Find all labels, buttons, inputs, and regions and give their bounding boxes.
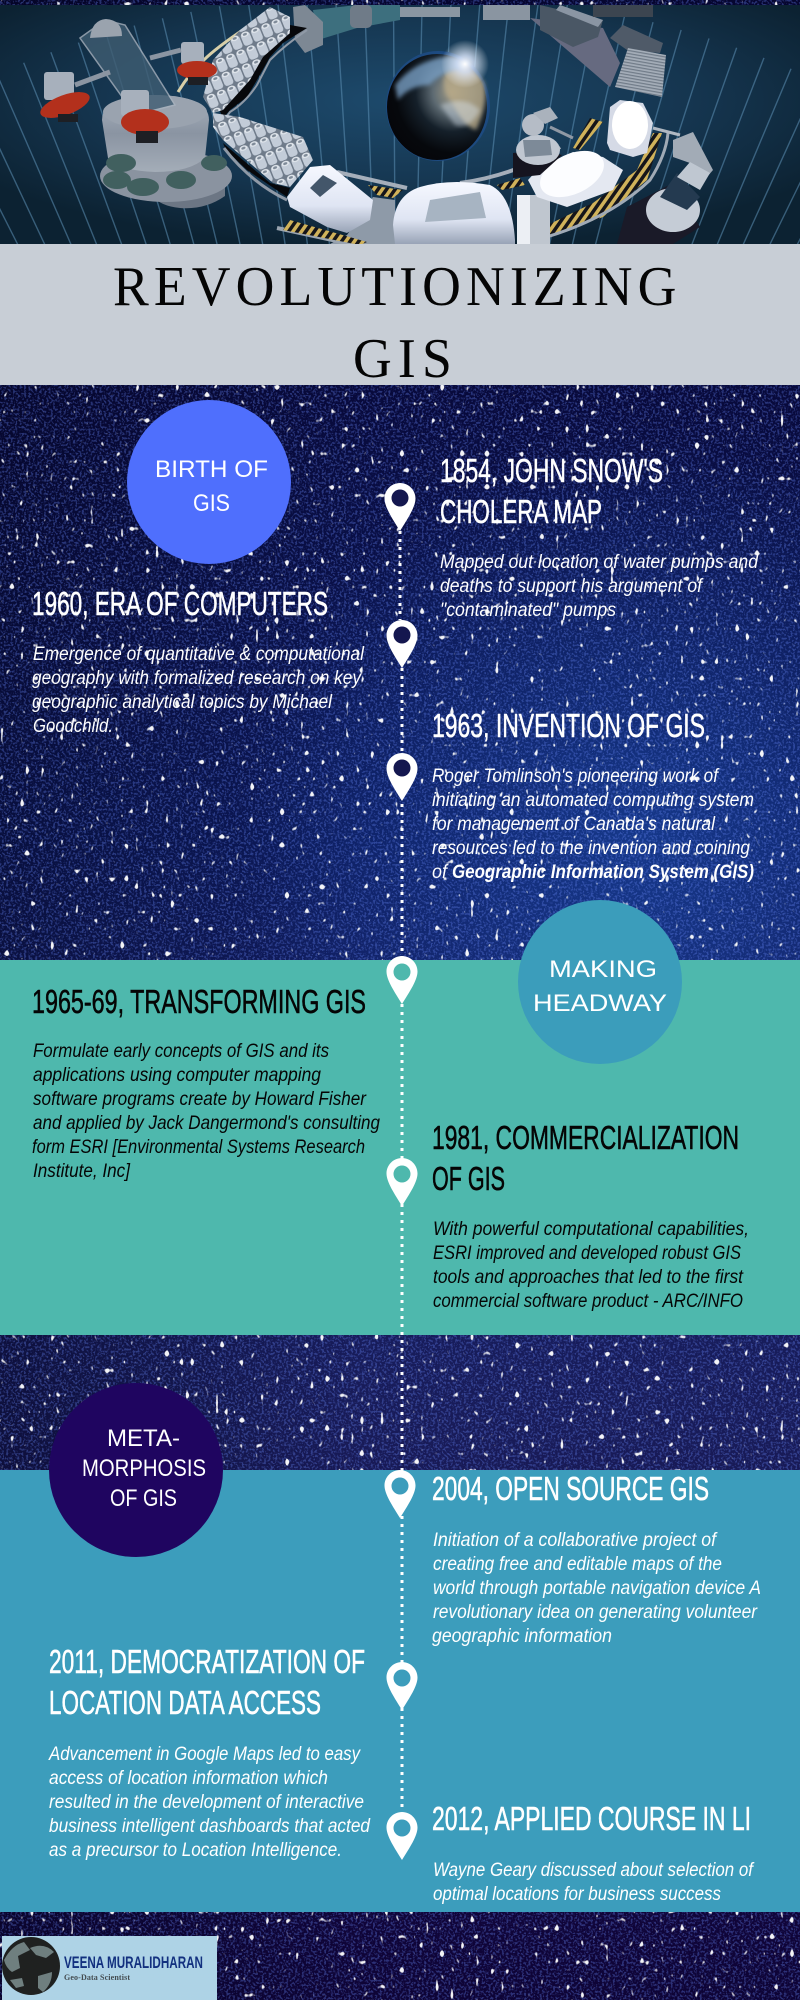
author banner: VEENA MURALIDHARAN [64,1953,203,1972]
text block: 1960 era of computers: 1960, ERA OF COMPUTERS [32,585,328,622]
left machine [37,19,232,208]
text block: 1960 era of computers [32,585,365,737]
section badge: metamorphosis of GIS [49,1383,223,1557]
section badge: metamorphosis of GIS: MORPHOSIS [82,1455,206,1482]
text block: 1965-69 transforming GIS: software programs create by Howard Fisher [33,1089,367,1110]
text block: 2012 applied course in LI [432,1800,755,1905]
heading: title: GIS [353,327,452,389]
cars on the line [287,100,653,244]
text block: 1981 commercialization of GIS: ESRI improved and developed robust GIS [433,1243,741,1264]
icon: red valves [37,42,217,143]
text block: 1854 John Snow [440,452,759,621]
text block: 1981 commercialization of GIS: OF GIS [432,1160,505,1197]
pin: 2012 [386,1812,418,1860]
text block: 1965-69 transforming GIS: and applied by Jack Dangermond's consulting [33,1113,380,1134]
assembly belt with hazard stripes [277,118,668,246]
text block: 1965-69 transforming GIS: applications using computer mapping [33,1065,321,1086]
pin: 1981 [386,1158,418,1206]
icon: globe [386,40,490,161]
section badge: birth of GIS [127,400,291,564]
text block: 1981 commercialization of GIS: commercial software product - ARC/INFO [433,1291,743,1312]
text block: 1965-69 transforming GIS: Formulate early concepts of GIS and its [33,1041,329,1062]
text block: 1960 era of computers: geographic analytical topics by Michael [32,692,333,713]
text block: 1981 commercialization of GIS: tools and approaches that led to the first [433,1267,744,1288]
text block: 2011 democratization of location data access: resulted in the development of interactive [49,1792,364,1813]
text block: 2004 open source GIS: creating free and editable maps of the [433,1554,722,1575]
text block: 1963 invention of GIS: Roger Tomlinson's pioneering work of [432,766,720,787]
text block: 1854 John Snow: CHOLERA MAP [440,493,602,530]
icon: author globe [2,1937,60,1995]
section badge: making headway: MAKING [549,956,657,983]
section badge: metamorphosis of GIS: OF GIS [110,1485,177,1512]
text block: 1965-69 transforming GIS: 1965-69, TRANSFORMING GIS [32,983,366,1020]
text block: 1965-69 transforming GIS: form ESRI [Environmental Systems Research [32,1137,365,1158]
text block: 2012 applied course in LI: optimal locations for business success [433,1884,721,1905]
conveyor band with bottles [178,7,313,200]
text block: 2011 democratization of location data access: business intelligent dashboards that acted [49,1816,371,1837]
text block: 2004 open source GIS [432,1470,761,1647]
title bar [0,244,800,389]
pin: 1965-69 [386,956,418,1004]
text block: 1854 John Snow: deaths to support his argument of [440,576,704,597]
section badge: birth of GIS: BIRTH OF [155,456,268,483]
text block: 1981 commercialization of GIS: With powerful computational capabilities, [433,1219,749,1240]
text block: 2011 democratization of location data access: access of location information which [49,1768,328,1789]
pin: 1854 [384,483,416,531]
text block: 1963 invention of GIS: initiating an automated computing system [432,790,754,811]
author banner: Geo-Data Scientist [64,1973,130,1982]
text block: 1965-69 transforming GIS [32,983,380,1182]
text block: 1963 invention of GIS: Geographic Information System (GIS) [452,862,754,883]
text block: 2011 democratization of location data access: 2011, DEMOCRATIZATION OF [49,1643,365,1680]
text block: 1981 commercialization of GIS [432,1119,749,1312]
text block: 2004 open source GIS: world through portable navigation device A [433,1578,761,1599]
text block: 1965-69 transforming GIS: Institute, Inc] [33,1161,131,1182]
text block: 1963 invention of GIS: resources led to the invention and coining [432,838,750,859]
text block: 2004 open source GIS: Initiation of a collaborative project of [433,1530,718,1551]
text block: 1960 era of computers: Goodchild. [33,716,113,737]
section badge: metamorphosis of GIS: META- [107,1425,180,1452]
text block: 2011 democratization of location data access: Advancement in Google Maps led to easy [48,1744,361,1765]
text block: 2011 democratization of location data access: LOCATION DATA ACCESS [49,1684,321,1721]
pin: 2004 [384,1470,416,1518]
timeline dotted line [400,531,402,1812]
text block: 1963 invention of GIS: for management of Canada's natural [432,814,716,835]
text block: 2011 democratization of location data access: as a precursor to Location Intelligence. [49,1840,342,1861]
panel: metamorphosis band [0,1470,800,1912]
heading: title: REVOLUTIONIZING [113,255,676,317]
pipe at the top [293,5,530,53]
text block: 1960 era of computers: Emergence of quantitative & computational [33,644,365,665]
text block: 2004 open source GIS: geographic information [432,1626,612,1647]
text block: 1960 era of computers: geography with formalized research on key [32,668,362,689]
heading: title [113,255,676,389]
pin: 2011 [386,1662,418,1710]
robot arms [513,107,713,244]
author banner [2,1936,217,2000]
section badge: making headway: HEADWAY [533,990,667,1017]
pin: 1963 [386,753,418,801]
text block: 2012 applied course in LI: Wayne Geary discussed about selection of [433,1860,755,1881]
hero illustration: factory assembly line around the globe [0,5,800,244]
text block: 1854 John Snow: "contaminated" pumps [440,600,616,621]
text block: 2011 democratization of location data access [48,1643,371,1861]
machinery top right [530,5,666,97]
text block: 1963 invention of GIS [432,707,754,883]
text block: 1854 John Snow: 1854, JOHN SNOW'S [440,452,663,489]
section badge: birth of GIS: GIS [193,490,230,517]
text block: 2004 open source GIS: revolutionary idea on generating volunteer [433,1602,758,1623]
text block: 1963 invention of GIS: of [432,862,449,883]
panel: making headway band [0,960,800,1335]
text block: 1854 John Snow: Mapped out location of water pumps and [440,552,759,573]
section badge: making headway [518,900,682,1064]
pin: 1960 [386,620,418,668]
